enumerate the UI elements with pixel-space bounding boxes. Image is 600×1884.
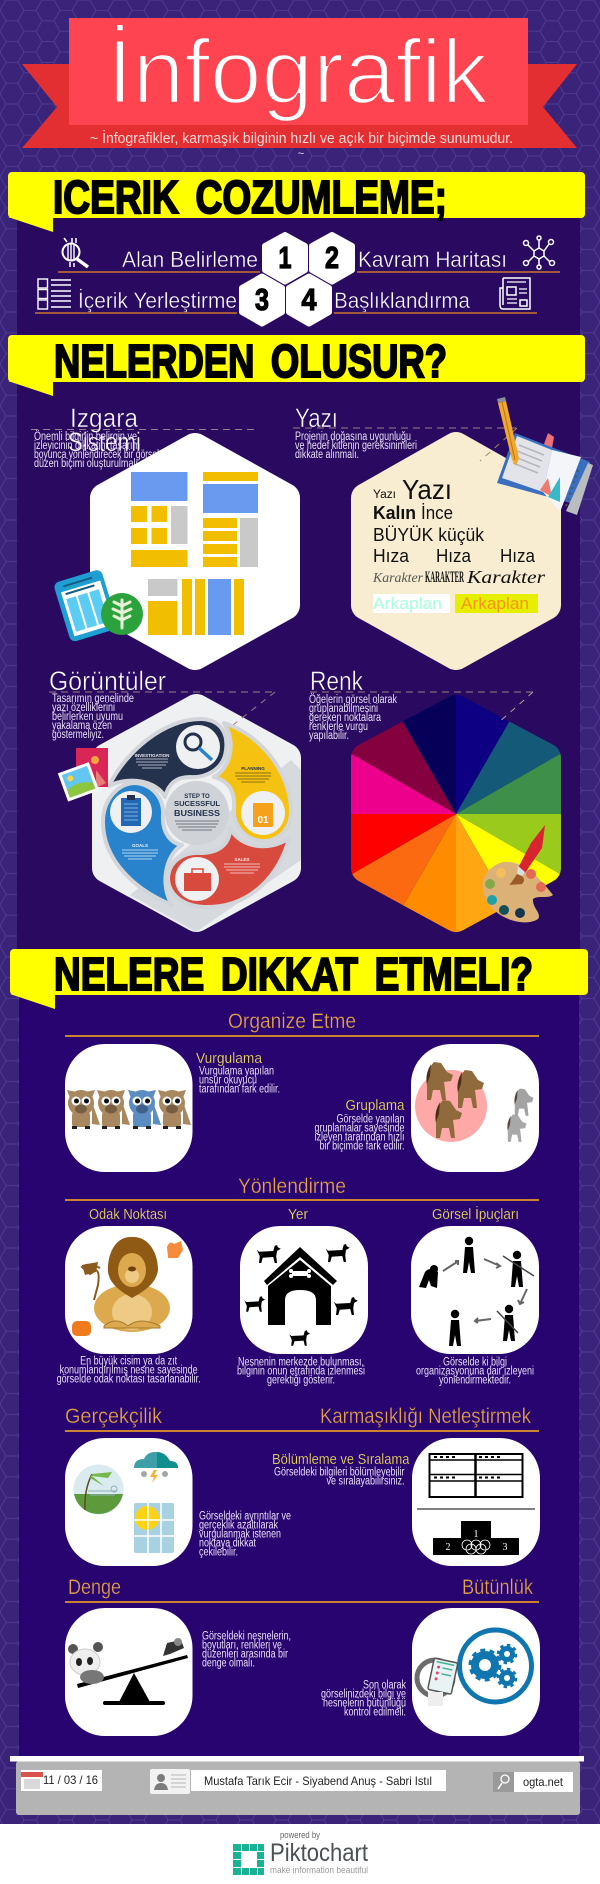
section: nelere dikkat etmeli xyxy=(10,948,588,1736)
block: renk: renklerle vurgu xyxy=(309,721,368,733)
block: ızgara sistemi: Önemli bilginin belirgin ve xyxy=(34,431,137,443)
sample type: Yazı xyxy=(373,489,396,501)
text: görsel ipuçları: yönlendirmektedir. xyxy=(439,1374,511,1386)
block: yazı: Projenin doğasına uygunluğu xyxy=(295,431,411,443)
text: gruplama: gruplamalar sayesinde xyxy=(314,1122,404,1134)
card: lion xyxy=(65,1226,192,1354)
text: yer: gerektiği gösterir. xyxy=(267,1374,335,1386)
block: ızgara sistemi: izleyicinin dikkatini tasarım xyxy=(34,440,140,452)
number hexagons: 4 xyxy=(302,282,317,317)
sample type: Yazı xyxy=(402,474,452,505)
website: ogta.net xyxy=(523,1775,564,1789)
text: bütünlük: Son olarak xyxy=(363,1680,406,1692)
subheadings: Organize Etme xyxy=(228,1010,356,1033)
text: odak noktası: konumlandırılmış nesne sayesinde xyxy=(60,1364,198,1376)
block: yazı: ve hedef kitlenin gereksinimleri xyxy=(295,440,417,452)
text: gerçekçilik: gerçeklik azaltılarak xyxy=(199,1520,278,1532)
text: gruplama: bir biçimde fark edilir. xyxy=(320,1140,404,1152)
footer xyxy=(10,1756,584,1815)
block: renk: yapılabilir. xyxy=(309,730,349,742)
icon: notebook and pencil xyxy=(497,397,593,515)
authors xyxy=(150,1769,446,1794)
item labels: Kavram Haritası xyxy=(358,247,507,272)
card: dog house xyxy=(240,1226,368,1354)
block: yazı xyxy=(293,397,593,655)
item labels: İçerik Yerleştirme xyxy=(78,288,237,313)
text: vurgulama: Vurgulama yapılan xyxy=(199,1066,274,1078)
card: visual cues xyxy=(411,1226,539,1354)
heading bar: ICERIK COZUMLEME; xyxy=(53,171,447,223)
block: yazı: Yazı xyxy=(295,403,338,433)
subheadings: Denge xyxy=(68,1576,121,1599)
sample type: Karakter xyxy=(466,567,546,587)
section: içerik çözümleme xyxy=(8,171,585,324)
icon: layout tile xyxy=(53,569,119,643)
piktochart credit: Piktochart xyxy=(270,1839,368,1867)
title banner xyxy=(22,18,577,148)
text: yer: bilginin onun etrafında izlenmesi xyxy=(237,1366,365,1378)
website xyxy=(493,1772,573,1792)
block: görüntüler: göstermeliyiz. xyxy=(52,729,104,741)
text: gruplama xyxy=(314,1097,405,1152)
card: gears xyxy=(412,1608,540,1736)
item labels: Alan Belirleme xyxy=(122,247,258,272)
icon: list xyxy=(38,279,71,309)
item labels: Başlıklandırma xyxy=(334,288,471,313)
block: renk: Renk xyxy=(310,666,363,696)
piktochart credit: powered by xyxy=(280,1830,320,1840)
piktochart logo xyxy=(233,1844,264,1875)
number hexagons: 3 xyxy=(255,282,269,317)
sample type: KARAKTER xyxy=(425,569,464,586)
text: yer xyxy=(237,1356,365,1386)
text: odak noktası: görselde odak noktası tasarlanabilir. xyxy=(57,1374,201,1386)
text: bölümleme: ve sıralayabilirsiniz. xyxy=(326,1476,404,1488)
underlines xyxy=(35,272,560,313)
colour wheel xyxy=(351,695,561,932)
sample type: Karakter xyxy=(372,571,424,586)
text: gruplama: izleyen tarafından hızlı xyxy=(314,1132,404,1144)
block: ızgara sistemi: boyunca yönlendirecek bir görsel xyxy=(34,449,159,461)
sample type xyxy=(372,474,546,587)
piktochart credit xyxy=(233,1830,368,1875)
card: seesaw xyxy=(65,1608,192,1736)
hexagon: business cycle: SALES xyxy=(234,857,250,862)
hexagon: business cycle: STEP TO xyxy=(184,794,210,800)
panel: lower dark background xyxy=(19,995,579,1756)
text: odak noktası xyxy=(57,1356,201,1386)
sample type: Kalın xyxy=(373,503,416,523)
sample type: Hıza xyxy=(500,546,536,566)
text: gerçekçilik: Görseldeki ayrıntılar ve xyxy=(199,1510,291,1522)
icon: palette and brush xyxy=(483,825,553,922)
hexagon: business cycle: INVESTIGATION xyxy=(135,753,169,758)
block: renk: gereken noktalara xyxy=(309,712,381,724)
block: görüntüler: Görüntüler xyxy=(49,666,166,696)
block: ızgara sistemi: düzen biçimi oluşturulmalı xyxy=(34,458,138,470)
block: görüntüler xyxy=(49,666,301,932)
column titles: Yer xyxy=(288,1206,308,1223)
text: bölümleme xyxy=(272,1451,410,1488)
text: denge: denge olmalı. xyxy=(202,1658,255,1670)
text: vurgulama: tarafından fark edilir. xyxy=(199,1084,280,1096)
card: gruplama xyxy=(411,1044,539,1172)
tilde: ~ xyxy=(298,148,304,160)
number hexagons: 2 xyxy=(325,240,339,275)
text: gerçekçilik: noktaya dikkat xyxy=(199,1538,257,1550)
icon: newspaper xyxy=(500,278,530,309)
icon: green leaf circle xyxy=(101,593,143,635)
card: sections and podium xyxy=(412,1438,540,1566)
text: gerçekçilik: vurgulanmak istenen xyxy=(199,1528,281,1540)
authors: Mustafa Tarık Ecir - Siyabend Anuş - Sabri Istıl xyxy=(204,1774,432,1788)
sample type: Hıza xyxy=(373,546,410,566)
title: İnfografik xyxy=(107,22,489,123)
block: ızgara sistemi xyxy=(31,403,285,655)
subheadings: Karmaşıklığı Netleştirmek xyxy=(320,1405,531,1428)
hexagon: business cycle: BUSINESS xyxy=(174,808,220,818)
date: 11 / 03 / 16 xyxy=(43,1773,98,1787)
sample type: BÜYÜK küçük xyxy=(373,524,485,545)
text: odak noktası: En büyük cisim ya da zıt xyxy=(80,1356,178,1368)
subtitle: ~ İnfografikler, karmaşık bilginin hızlı ve açık bir biçimde sunumudur. xyxy=(90,129,513,147)
block: yazı: dikkate alınmalı. xyxy=(295,449,359,461)
text: denge: boyutları, renkleri ve xyxy=(202,1640,282,1652)
card: vurgulama xyxy=(65,1044,192,1172)
column titles xyxy=(89,1205,519,1223)
text: bütünlük xyxy=(321,1680,406,1718)
text: bütünlük: nesnelerin bütünlüğü xyxy=(323,1698,406,1710)
item labels xyxy=(78,247,507,313)
text: vurgulama xyxy=(196,1050,280,1096)
section: nelerden oluşur xyxy=(8,335,593,932)
sample type: Hıza xyxy=(436,546,472,566)
sample type: İnce xyxy=(421,503,453,523)
hexagon: business cycle: 01 xyxy=(257,815,269,826)
subheadings: Yönlendirme xyxy=(238,1175,346,1198)
hexagon: grid xyxy=(105,448,285,655)
text: denge xyxy=(202,1630,291,1670)
subheadings: Bütünlük xyxy=(462,1576,533,1599)
text: gerçekçilik: çekilebilir. xyxy=(199,1546,238,1558)
hexagon: business cycle: GOALS xyxy=(132,843,148,848)
hexagon: business cycle xyxy=(103,692,301,932)
text: bölümleme: Görseldeki bilgileri bölümleyebilir xyxy=(274,1466,405,1478)
text: gerçekçilik xyxy=(199,1510,291,1558)
text: vurgulama: unsur okuyucu xyxy=(199,1074,257,1086)
hexagon: paper xyxy=(366,447,546,655)
date xyxy=(21,1770,102,1791)
piktochart credit: make information beautiful xyxy=(270,1865,368,1875)
number hexagons xyxy=(242,235,352,324)
block: ızgara sistemi: Sistemi xyxy=(68,427,141,457)
number hexagons: 1 xyxy=(278,240,292,275)
text: gruplama: Görselde yapılan xyxy=(336,1114,404,1126)
block: görüntüler: yakalama özen xyxy=(52,720,112,732)
block: renk: Öğelerin görsel olarak xyxy=(309,694,397,706)
block: yazı: Arkaplan xyxy=(373,594,442,613)
section rules xyxy=(65,1036,539,1602)
text: bütünlük: kontrol edilmeli. xyxy=(344,1706,406,1718)
card: sections and podium: 3 xyxy=(502,1542,508,1553)
subheadings: Gerçekçilik xyxy=(65,1405,162,1428)
column titles: Odak Noktası xyxy=(89,1206,167,1223)
text: vurgulama: Vurgulama xyxy=(196,1050,263,1067)
icon: network xyxy=(524,236,554,269)
block: ızgara sistemi: Izgara xyxy=(70,403,139,433)
block: görüntüler: Tasarımın genelinde xyxy=(52,693,134,705)
text: görsel ipuçları: organizasyonuna dair izleyeni xyxy=(416,1366,534,1378)
hexagon: business cycle: PLANNING xyxy=(241,766,265,771)
icon: magnifier xyxy=(62,238,88,267)
hexagon: business cycle: SUCESSFUL xyxy=(174,799,220,808)
block: görüntüler: yazı özelliklerini xyxy=(52,702,115,714)
text: bölümleme: Bölümleme ve Sıralama xyxy=(272,1451,410,1468)
text: bütünlük: görselinizdeki bilgi ve xyxy=(321,1688,406,1700)
block: yazı: Arkaplan xyxy=(461,594,529,613)
heading bar: NELERDEN OLUSUR? xyxy=(54,335,447,387)
text: görsel ipuçları xyxy=(416,1356,534,1386)
panel: upper dark background xyxy=(17,218,580,949)
text: denge: Görseldeki nesnelerin, xyxy=(202,1630,291,1642)
card: sections and podium: 2 xyxy=(446,1542,450,1553)
icon: photos xyxy=(58,748,108,802)
column titles: Görsel İpuçları xyxy=(432,1205,519,1223)
text: gruplama: Gruplama xyxy=(346,1097,405,1114)
block: görüntüler: belirlerken uyumu xyxy=(52,711,123,723)
card: sections and podium: 1 xyxy=(474,1529,478,1540)
block: renk: gruplanabilmesini xyxy=(309,703,378,715)
text: denge: düzenleri arasında bir xyxy=(202,1648,288,1660)
block: renk xyxy=(309,670,561,932)
text: görsel ipuçları: Görselde ki bilgi xyxy=(443,1356,507,1368)
card: weather xyxy=(65,1438,192,1566)
subheadings xyxy=(65,1010,533,1599)
text: yer: Nesnenin merkezde bulunması, xyxy=(238,1356,364,1368)
